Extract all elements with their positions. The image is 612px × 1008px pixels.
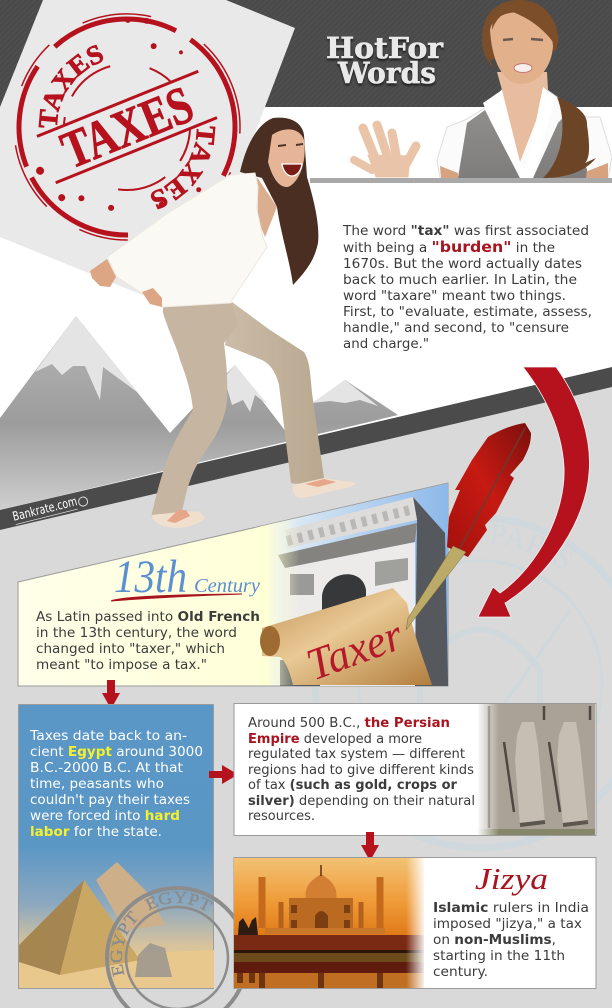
13th Century heading: Century (194, 575, 260, 597)
intro text: handle," and second, to "censure (343, 321, 569, 336)
Persian text: Empire developed a more (248, 732, 422, 747)
big curved arrow (478, 367, 589, 617)
host hair (482, 0, 558, 67)
Persian relief photo (477, 704, 595, 835)
grey lower background (0, 387, 612, 1008)
left shoe (151, 511, 205, 528)
host mouth (514, 64, 532, 72)
13th century text: changed into "taxer," which (36, 642, 225, 657)
13th century text (36, 610, 260, 673)
Jizya text (433, 901, 589, 980)
tilted paper sheet (0, 0, 295, 312)
panel: 13th century (18, 483, 448, 690)
host eyes (503, 39, 543, 40)
Egypt text: Taxes date back to an- (29, 729, 187, 744)
panel: Jizya (234, 858, 596, 988)
faint Paris seal (312, 516, 612, 852)
host vest (458, 110, 587, 178)
logo: HotFor Words (326, 31, 444, 90)
intro text (342, 224, 592, 352)
stamp main word: TAXES (53, 76, 201, 180)
host shirt and arms (437, 87, 612, 178)
Persian text: silver) depending on their natural (248, 794, 475, 809)
back hair (240, 118, 318, 285)
host arms (440, 163, 608, 178)
back leg (225, 302, 324, 484)
Jizya text: starting in the 11th (433, 949, 565, 964)
Jizya text: Islamic rulers in India (433, 901, 589, 916)
mountain snow caps (35, 316, 378, 412)
arrow: 13th century to Egypt (102, 680, 120, 709)
Egypt text (29, 729, 203, 840)
divider bar under host (310, 178, 612, 183)
13th Century heading: 13th (114, 551, 187, 603)
eyes (278, 144, 303, 146)
parchment scroll (260, 588, 432, 690)
panel: Persian Empire (234, 704, 596, 836)
stamp top word: TAXES (38, 44, 104, 128)
Persian text: regulated tax system — different (248, 747, 465, 762)
arrow: Egypt to Persia (209, 765, 238, 784)
pyramids (19, 862, 214, 988)
sweater (107, 173, 267, 307)
intro text: 1670s. But the word actually dates (343, 257, 582, 272)
intro text: The word "tax" was first associated (342, 224, 589, 239)
Jizya text: imposed "jizya," a tax (433, 917, 582, 932)
Arc de Triomphe photo (260, 484, 448, 686)
Egypt text: cient Egypt around 3000 (30, 745, 203, 760)
Persian text: of tax (such as gold, crops or (248, 778, 458, 793)
panel: Egypt (18, 704, 214, 988)
Egypt postage stamp (105, 886, 242, 1008)
intro text: word "taxare" meant two things. (343, 289, 566, 304)
Egypt text: B.C.-2000 B.C. At that (30, 761, 183, 776)
faint Paris seal: PARIS (490, 524, 573, 568)
front leg (151, 303, 238, 517)
header band (0, 0, 612, 107)
intro text: with being a "burden" in the (343, 238, 555, 256)
host fringe (492, 3, 558, 46)
Egypt text: labor for the state. (30, 825, 162, 840)
face (268, 129, 305, 187)
arrow: Persia to Jizya (361, 832, 379, 861)
intro text: First, to "evaluate, estimate, assess, (343, 305, 592, 320)
neck and chest skin (257, 177, 277, 237)
13th Century heading (111, 551, 260, 603)
host ponytail (543, 97, 596, 178)
Taxer script: Taxer (300, 609, 410, 690)
right shoe (293, 478, 357, 498)
stamp ring word: EGYPT (144, 891, 213, 911)
Persian text: Around 500 B.C., the Persian (248, 716, 450, 731)
13th century text: meant "to impose a tax." (36, 658, 207, 673)
logo: HotFor Words: Words (337, 56, 436, 90)
TAXES rubber stamp (14, 13, 241, 241)
intro text: back to much earlier. In Latin, the (343, 273, 577, 288)
presenter: HotForWords host (437, 0, 612, 178)
stamp band (37, 71, 217, 183)
13th century text: in the 13th century, the word (36, 626, 237, 641)
Egypt postage stamp: EGYPT (110, 910, 138, 977)
host face (490, 12, 553, 84)
Egypt text: were forced into hard (30, 809, 180, 824)
Jizya script heading: Jizya (475, 861, 548, 896)
Persian text: resources. (248, 809, 315, 824)
intro text: and charge." (343, 337, 429, 352)
Egypt text: time, peasants who (30, 777, 164, 792)
icon: waving hand (354, 125, 416, 177)
right foot skin (305, 479, 336, 487)
open mouth (282, 164, 302, 176)
stamp bottom word: TAXES (150, 126, 216, 210)
13th century text: As Latin passed into Old French (36, 610, 260, 625)
Egypt text: couldn't pay their taxes (30, 793, 190, 808)
host neck (493, 72, 548, 162)
quill pen (406, 423, 531, 630)
host collar (483, 87, 555, 178)
hands (90, 259, 162, 307)
logo: HotFor Words: HotFor (326, 31, 444, 65)
diagonal dark band (0, 367, 612, 530)
mountains (0, 316, 398, 510)
Persian text: regions had to give different kinds (248, 763, 474, 778)
Jizya text: on non-Muslims , (433, 933, 556, 948)
Taj Mahal photo (234, 858, 426, 988)
woman carrying the tax sheet (90, 118, 357, 528)
Persian text (248, 716, 475, 824)
Bankrate logo: Bankrate.com (11, 493, 78, 524)
Jizya text: century. (433, 965, 488, 980)
left foot skin (167, 510, 190, 523)
